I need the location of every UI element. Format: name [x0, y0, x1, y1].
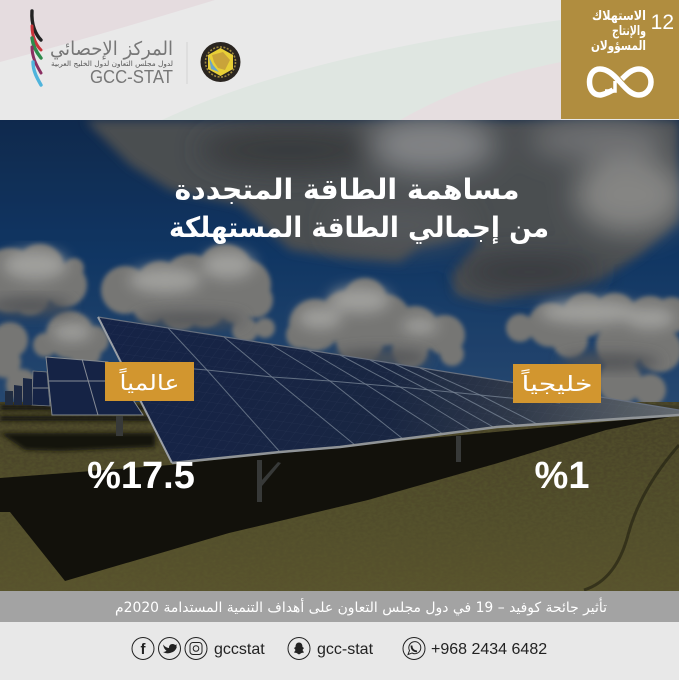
grass texture: [0, 402, 679, 493]
far panel rows: [5, 357, 143, 415]
cloud undersides: [0, 298, 660, 370]
icon: instagram: [185, 638, 207, 660]
phone number: +968 2434 6482: [431, 641, 547, 658]
main panel shadow: [0, 415, 679, 581]
footer: [0, 622, 679, 680]
sky: [0, 120, 679, 420]
ground: [0, 402, 679, 592]
icon: snapchat: [288, 638, 310, 660]
SDG title: المسؤولان: [591, 39, 646, 54]
emblem: GCC: [200, 42, 240, 82]
logo Arabic name: المركز الإحصائي: [50, 38, 173, 60]
divider: [186, 42, 188, 84]
SDG title: والإنتاج: [612, 24, 646, 39]
cloud highlights: [3, 250, 675, 341]
handle: gcc-stat: gcc-stat: [317, 641, 374, 658]
label: global: [105, 362, 194, 401]
icon: facebook: f: [140, 641, 146, 658]
source bar: تأثير جائحة كوفيد – 19 في دول مجلس التعاون على أهداف التنمية المستدامة 2020م: [115, 597, 607, 616]
value: global 17.5%: %17.5: [87, 455, 195, 497]
logo Arabic subtitle: لدول مجلس التعاون لدول الخليج العربية: [51, 60, 173, 68]
icon: facebook: [132, 638, 154, 660]
far field strips: [0, 405, 155, 451]
title: من إجمالي الطاقة المستهلكة: [169, 211, 549, 245]
main panel row: [98, 317, 679, 463]
SDG number: 12: [651, 11, 674, 34]
big grey cloud: [85, 117, 679, 302]
SDG title: [591, 9, 646, 54]
value: GCC 1%: %1: [535, 455, 589, 497]
title: [169, 173, 549, 245]
icon: infinity loop: [590, 69, 651, 95]
SDG title: الاستهلاك: [592, 9, 646, 24]
cloud bodies: [0, 244, 679, 406]
panel frame: [98, 317, 679, 410]
logo: GCC-STAT: [32, 11, 173, 87]
posts: [116, 416, 461, 502]
label: GCC: [513, 364, 601, 403]
title: مساهمة الطاقة المتجددة: [174, 173, 520, 206]
SDG 12 panel: [561, 0, 679, 119]
photo: solar farm: [0, 117, 679, 592]
logo ribbon: [32, 11, 41, 85]
dark overlay: [0, 134, 679, 464]
source bar: [0, 591, 679, 622]
logo GCC-STAT text: GCC-STAT: [90, 67, 173, 87]
icon: whatsapp: [403, 638, 425, 660]
label: GCC: خليجياً: [521, 368, 592, 396]
far tree line: [646, 404, 679, 410]
panel dividers: [133, 328, 560, 452]
header background: [0, 0, 561, 120]
icon: twitter: [158, 638, 180, 660]
label: global: عالمياً: [119, 367, 180, 395]
handle: gccstat: gccstat: [214, 641, 265, 658]
right field track: [584, 445, 679, 590]
white clouds: [0, 244, 679, 406]
